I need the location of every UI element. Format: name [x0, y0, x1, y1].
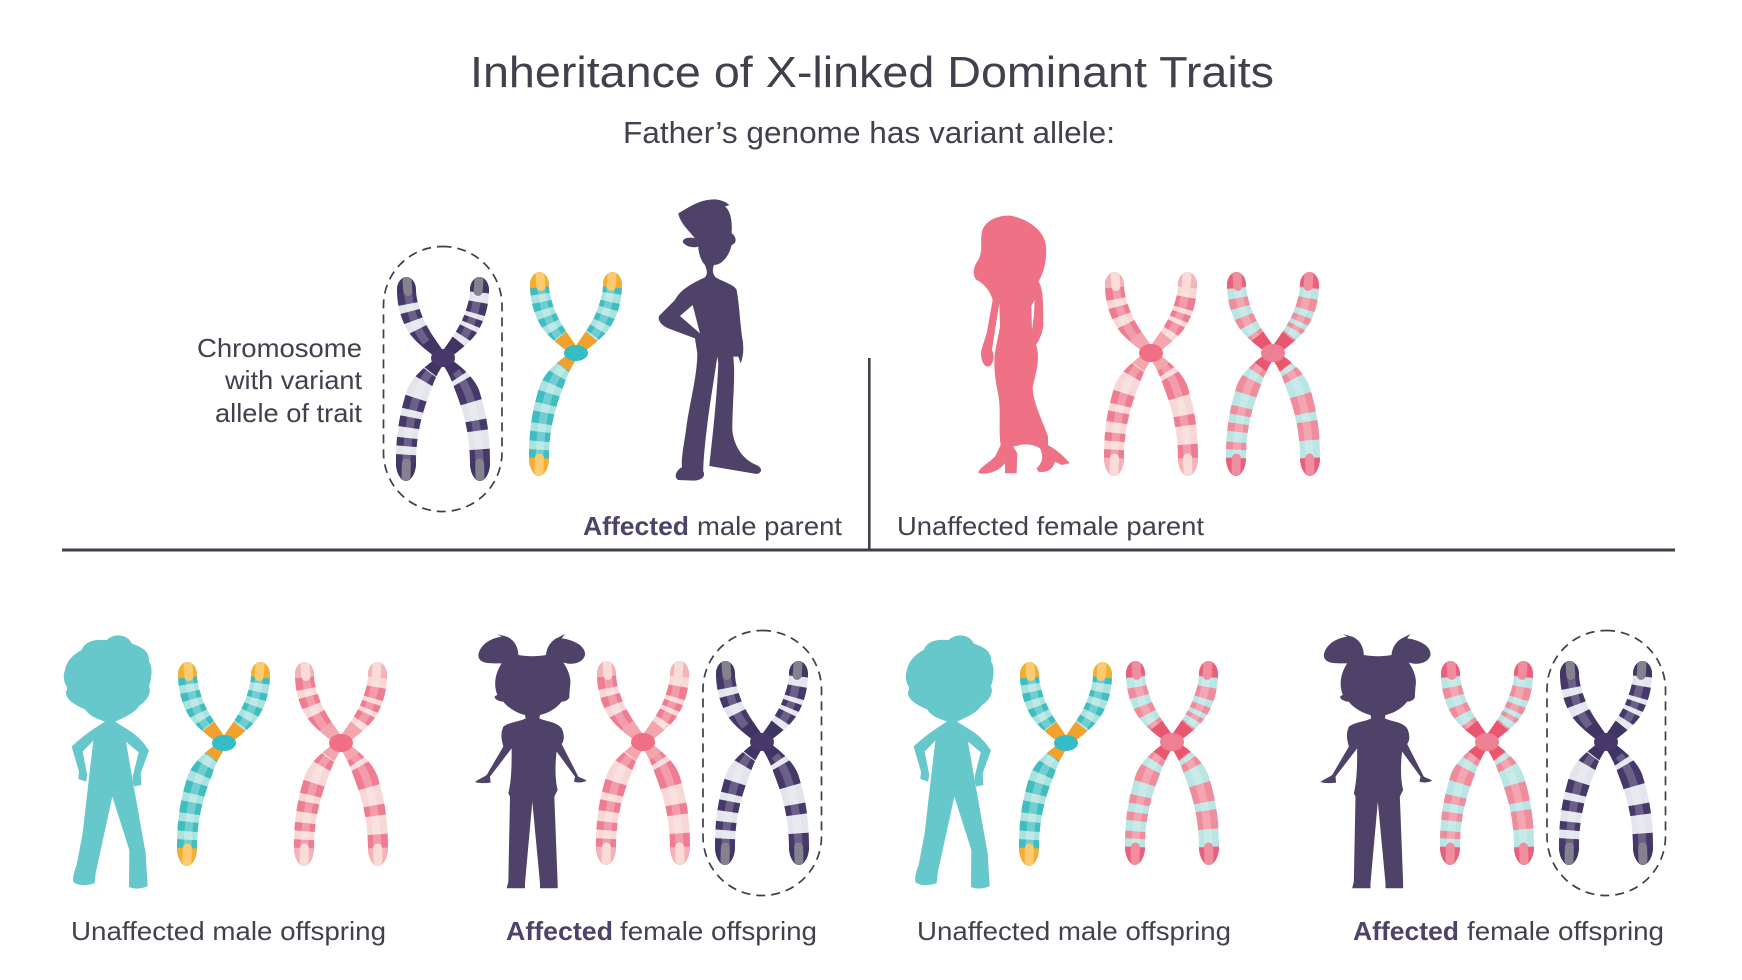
panel: affected male parent — [384, 199, 843, 541]
chromosome: X pink — [304, 658, 378, 869]
label: affected male parent — [583, 511, 843, 541]
chromosome: X pink — [606, 657, 680, 868]
panel: offspring 4, affected female — [1320, 630, 1666, 946]
legend note: chromosome with variant allele: Chromosome — [197, 333, 362, 363]
subtitle: Father’s genome has variant allele: — [623, 115, 1115, 150]
silhouette: boy — [906, 635, 994, 889]
label: affected female offspring — [506, 916, 817, 946]
panel: offspring 2, affected female — [475, 630, 822, 946]
chromosome: X with variant allele — [725, 657, 799, 868]
silhouette: male parent — [659, 199, 761, 481]
panel: unaffected female parent — [897, 216, 1310, 541]
label: affected female offspring — [1353, 916, 1664, 946]
chromosome: X pink and teal — [1450, 657, 1524, 868]
chromosome: Y — [1029, 658, 1102, 869]
divider: vertical between parents — [868, 358, 871, 550]
chromosome: Y — [539, 268, 612, 479]
legend note: chromosome with variant allele: allele of trait — [215, 398, 363, 428]
silhouette: girl — [475, 634, 587, 888]
label: affected female offspring: female offspring — [1467, 916, 1664, 946]
dashed outline around variant chromosome — [1547, 630, 1666, 896]
label: affected male parent: Affected — [583, 511, 689, 541]
dashed outline around variant chromosome — [384, 246, 502, 512]
panel: offspring 1, unaffected male — [64, 635, 386, 946]
label: unaffected male offspring: Unaffected male offspring — [917, 916, 1231, 946]
label: affected female offspring: Affected — [506, 916, 613, 946]
label: unaffected female parent: Unaffected female parent — [897, 511, 1205, 541]
silhouette: female parent — [974, 216, 1070, 474]
label: unaffected male offspring: Unaffected male offspring — [71, 916, 386, 946]
label: affected female offspring: female offspring — [620, 916, 817, 946]
title: Inheritance of X-linked Dominant Traits — [470, 48, 1274, 97]
label: affected female offspring: Affected — [1353, 916, 1459, 946]
chromosome: X pink and teal — [1236, 268, 1310, 479]
panel: offspring 3, unaffected male — [906, 635, 1231, 946]
chromosome: X with variant allele — [1569, 657, 1643, 868]
legend note: chromosome with variant allele: with variant — [224, 365, 363, 395]
chromosome: X pink — [1114, 268, 1188, 479]
silhouette: girl — [1320, 634, 1432, 888]
label: affected male parent: male parent — [697, 511, 843, 541]
chromosome: X pink and teal — [1135, 657, 1209, 868]
divider: horizontal between parents and offspring — [62, 548, 1675, 552]
chromosome: Y — [187, 658, 260, 869]
chromosome: X with variant allele — [406, 273, 480, 484]
silhouette: boy — [64, 635, 152, 889]
legend note: chromosome with variant allele — [197, 333, 363, 428]
dashed outline around variant chromosome — [703, 630, 822, 896]
